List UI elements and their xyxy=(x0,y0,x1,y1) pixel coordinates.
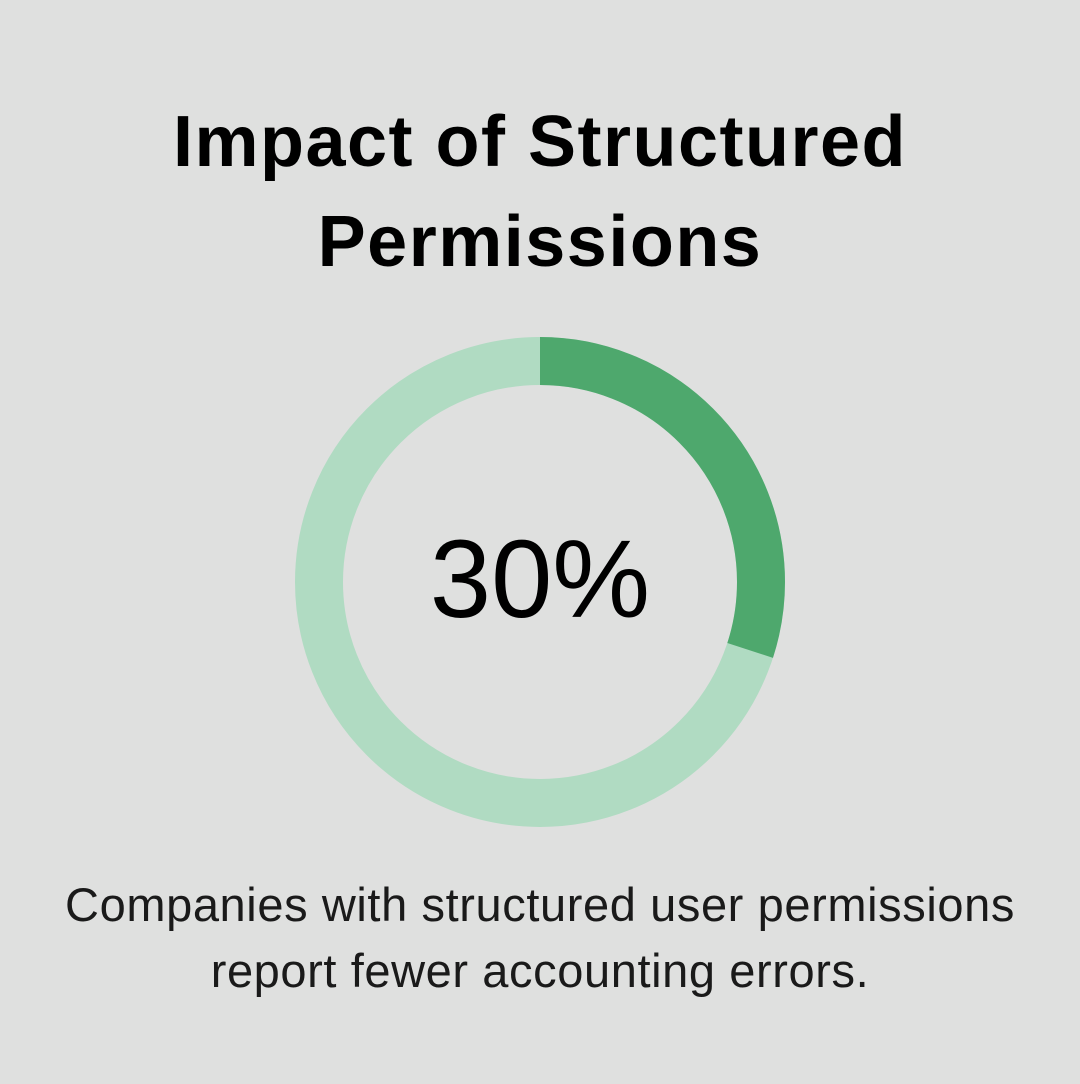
title xyxy=(173,102,907,282)
caption: Companies with structured user permissions xyxy=(65,878,1015,931)
percentage value: 30% xyxy=(430,518,650,641)
title: Permissions xyxy=(318,202,762,282)
title: Impact of Structured xyxy=(173,102,907,182)
caption: report fewer accounting errors. xyxy=(211,944,869,997)
caption xyxy=(65,878,1015,997)
